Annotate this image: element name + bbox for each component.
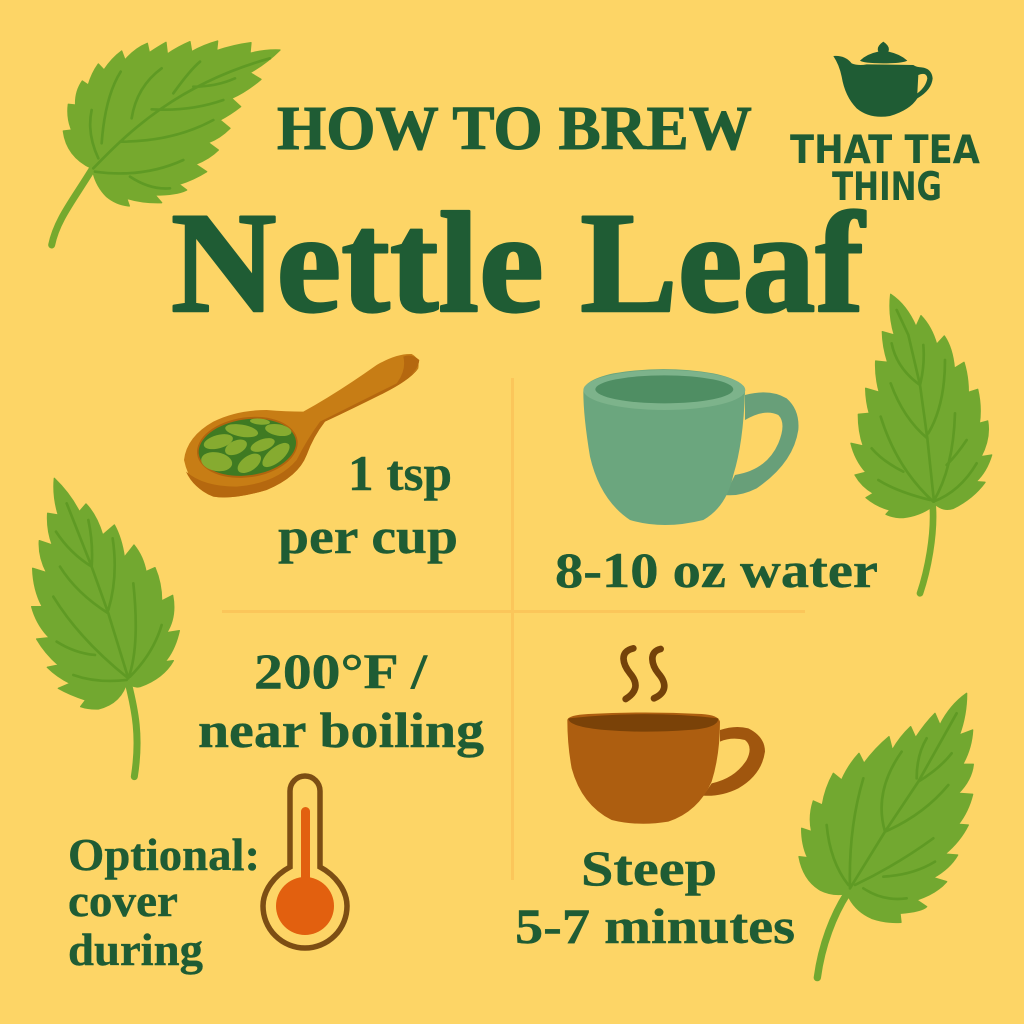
icon: wooden spoon with nettle leaves [184, 354, 419, 497]
heading: how to brew: HOW TO BREW [277, 95, 752, 163]
label: water: 8-10 oz water [555, 542, 878, 598]
leaf: upper right [851, 294, 992, 593]
label: steep time: Steep [581, 840, 717, 896]
icon: teapot [833, 42, 933, 117]
label: steep time: 5-7 minutes [515, 898, 795, 954]
icon: green mug [583, 369, 798, 525]
logo text line 2: THING [832, 165, 942, 210]
label: optional note: Optional: [68, 829, 260, 880]
label: dose: per cup [278, 508, 458, 564]
spoon leaves [200, 418, 293, 477]
leaf: top left [52, 41, 280, 245]
label: dose: 1 tsp [348, 445, 452, 501]
icon: thermometer [263, 776, 347, 948]
label: temperature [198, 643, 484, 758]
label: dose [278, 445, 458, 564]
label: optional note: cover [68, 875, 178, 926]
logo: that tea thing [790, 42, 980, 210]
leaf: left [32, 478, 179, 777]
label: temperature: 200°F / [254, 643, 428, 699]
label: optional note: during [68, 924, 203, 975]
icon: steam [624, 648, 664, 699]
label: steep time [515, 840, 795, 954]
leaf: lower right [799, 693, 973, 978]
label: temperature: near boiling [198, 702, 484, 758]
label: optional note [68, 829, 260, 975]
logo text line 1: THAT TEA [790, 128, 980, 173]
icon: brown cup [567, 712, 765, 824]
title: nettle leaf: Nettle Leaf [171, 184, 866, 343]
